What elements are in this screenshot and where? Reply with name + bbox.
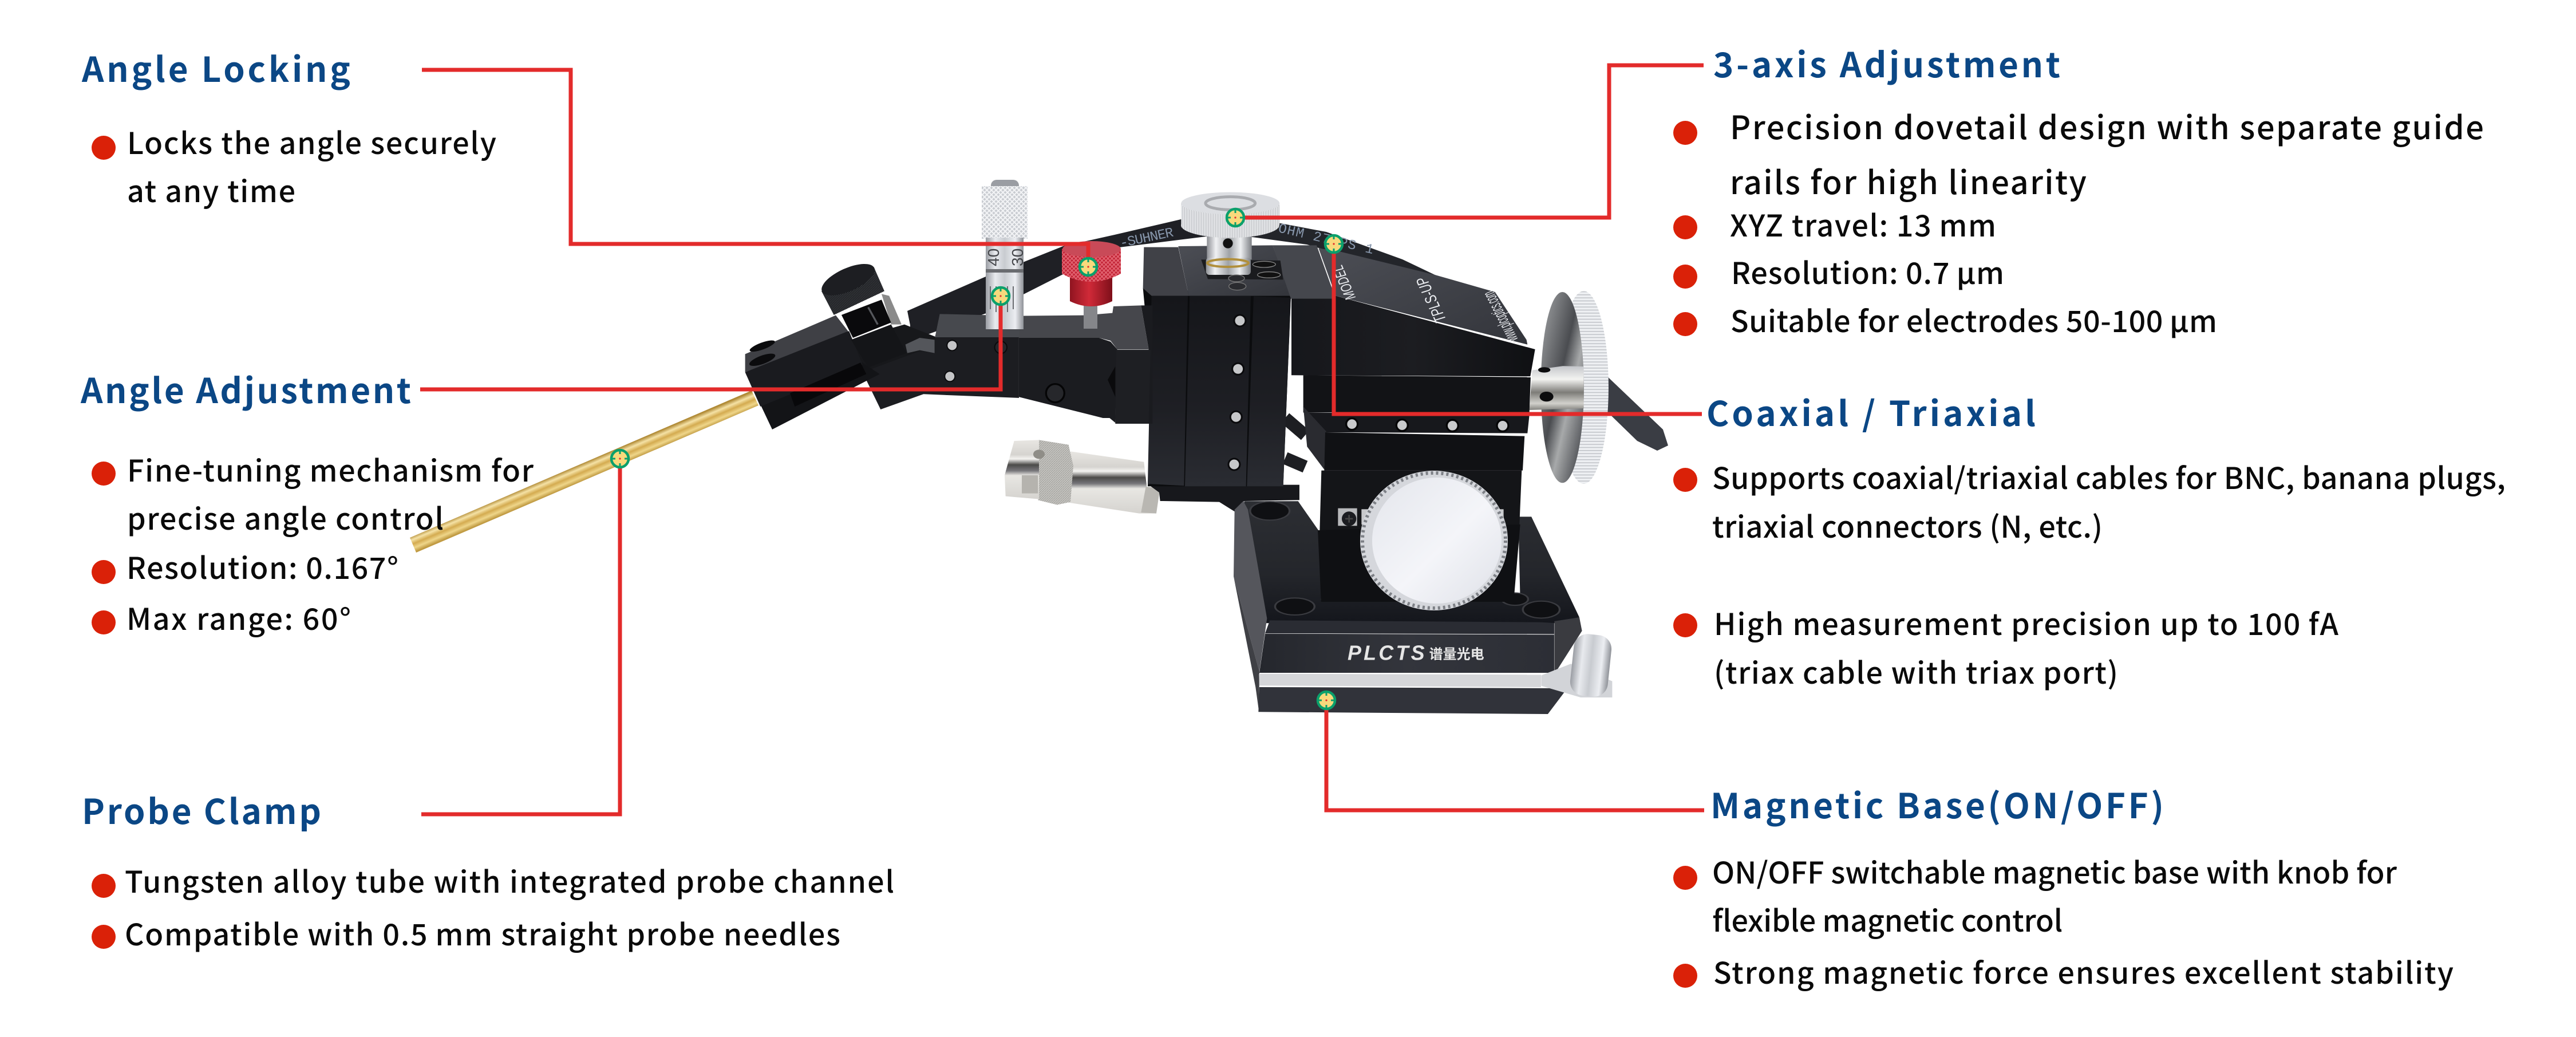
magnetic base bbox=[1234, 501, 1613, 714]
panel: 3-axis Adjustment bbox=[1673, 38, 2484, 341]
bullet list: Locks the angle securely bbox=[127, 120, 496, 163]
bullet list: XYZ travel: 13 mm bbox=[1730, 202, 1996, 245]
product illustration: probe positioner bbox=[410, 180, 1668, 714]
bullet list: (triax cable with triax port) bbox=[1714, 649, 2118, 692]
leader line: Probe Clamp bbox=[421, 459, 620, 814]
top Z knob bbox=[1181, 192, 1283, 290]
logo: PLCTS bbox=[1348, 641, 1425, 665]
bullet list: Compatible with 0.5 mm straight probe needles bbox=[125, 911, 840, 954]
bullet list: Suitable for electrodes 50-100 µm bbox=[1730, 298, 2217, 341]
heading: Magnetic Base(ON/OFF) bbox=[1710, 779, 2164, 829]
bullet list: at any time bbox=[127, 168, 295, 211]
bullet list: precise angle control bbox=[127, 495, 444, 538]
heading: Probe Clamp bbox=[82, 784, 321, 834]
leader line: Coaxial / Triaxial bbox=[1334, 244, 1702, 414]
micrometer: 40 bbox=[985, 249, 1002, 266]
angled top plate with engraving: www.plcoptics.com bbox=[1480, 287, 1522, 345]
bullet list bbox=[92, 120, 496, 211]
bullet list: Resolution: 0.167° bbox=[127, 545, 398, 587]
column screws bbox=[1228, 315, 1246, 470]
marker: top knob bbox=[1227, 209, 1244, 226]
arm pins bbox=[945, 340, 957, 381]
small bracket with Phillips screw bbox=[1338, 508, 1357, 526]
bullet list: rails for high linearity bbox=[1730, 157, 2087, 204]
angled top plate with engraving: MODEL bbox=[1329, 263, 1359, 303]
hex screws near knob bbox=[1253, 261, 1281, 278]
bullet list: ON/OFF switchable magnetic base with knob for bbox=[1712, 849, 2397, 892]
bullet list: Supports coaxial/triaxial cables for BNC, banana plugs, bbox=[1712, 455, 2506, 498]
cable: -SUHNER bbox=[1119, 226, 1175, 252]
brass probe clamp tube bbox=[410, 391, 758, 553]
bullet list: High measurement precision up to 100 fA bbox=[1714, 601, 2339, 644]
micrometer bbox=[982, 180, 1028, 329]
bullet list bbox=[1673, 849, 2453, 992]
side wheel bbox=[1530, 291, 1609, 484]
base side and front bar bbox=[1234, 501, 1567, 714]
angled top plate with engraving bbox=[1318, 248, 1527, 345]
cable strands under column bbox=[1149, 418, 1305, 511]
heading: Coaxial / Triaxial bbox=[1706, 387, 2036, 436]
probe clamp block bbox=[745, 362, 880, 429]
leader line: Angle Adjustment bbox=[420, 296, 1001, 389]
marker: red knob bbox=[1080, 258, 1097, 275]
bullet list bbox=[92, 447, 534, 638]
bullet list: flexible magnetic control bbox=[1712, 897, 2063, 940]
bullet list bbox=[1673, 455, 2506, 692]
panel: Probe Clamp bbox=[82, 784, 894, 954]
XY stage body bbox=[1291, 296, 1535, 538]
base top surface bbox=[1244, 501, 1579, 623]
panel: Angle Locking bbox=[81, 42, 496, 211]
bullet list: Max range: 60° bbox=[127, 596, 351, 638]
clamp locking screw bbox=[817, 258, 906, 368]
marker: cable bbox=[1325, 235, 1342, 253]
red locking knob bbox=[1062, 241, 1121, 329]
marker: micrometer bbox=[992, 287, 1009, 305]
bullet list: Precision dovetail design with separate guide bbox=[1730, 102, 2484, 149]
panel: Angle Adjustment bbox=[80, 364, 534, 638]
clamp holes bbox=[748, 338, 777, 368]
BNC connector bbox=[1005, 440, 1160, 514]
heading: 3-axis Adjustment bbox=[1713, 38, 2060, 88]
base screw holes bbox=[1250, 502, 1560, 618]
base lever knob bbox=[1541, 633, 1613, 698]
micrometer: 30 bbox=[1009, 249, 1026, 266]
cable: OHM 27 PS 1 bbox=[1277, 221, 1375, 258]
cable bbox=[907, 219, 1668, 451]
bullet list bbox=[92, 858, 894, 954]
panel: Coaxial / Triaxial bbox=[1673, 387, 2506, 692]
marker: brass tube bbox=[611, 450, 629, 467]
bullet list: Resolution: 0.7 µm bbox=[1731, 250, 2004, 293]
bullet list bbox=[1673, 102, 2484, 341]
heading: Angle Adjustment bbox=[80, 364, 411, 413]
stage screws bbox=[1346, 419, 1508, 431]
angled top plate with engraving: TPLS-UP bbox=[1413, 274, 1449, 326]
leader line: 3-axis Adjustment bbox=[1235, 65, 1704, 218]
leader line: Magnetic Base bbox=[1326, 700, 1704, 810]
bullet list: triaxial connectors (N, etc.) bbox=[1712, 503, 2103, 546]
bullet list: Strong magnetic force ensures excellent stability bbox=[1713, 949, 2453, 992]
base side and front bar: 谱量光电 bbox=[1429, 643, 1484, 663]
angle adjustment arm bbox=[745, 258, 1152, 429]
vertical column bbox=[1143, 245, 1336, 486]
panel: Magnetic Base bbox=[1673, 779, 2453, 992]
heading: Angle Locking bbox=[81, 42, 350, 92]
bullet list: Fine-tuning mechanism for bbox=[127, 447, 534, 490]
marker: base bbox=[1318, 692, 1335, 709]
leader line: Angle Locking bbox=[422, 70, 1088, 267]
large silver knob bbox=[1360, 471, 1508, 610]
bullet list: Tungsten alloy tube with integrated probe channel bbox=[125, 858, 894, 901]
